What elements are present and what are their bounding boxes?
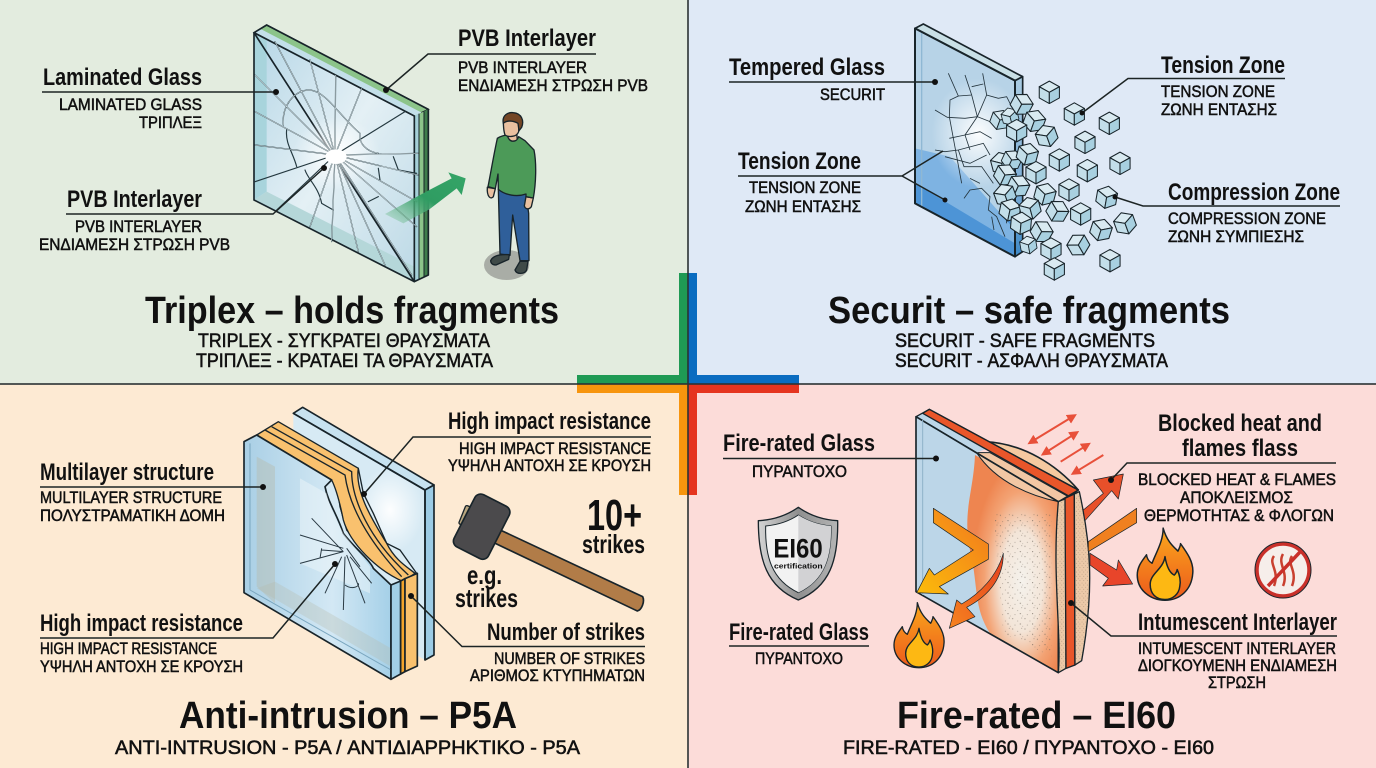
label: strikes count: strikes bbox=[582, 529, 645, 559]
illustration: multilayer glass bbox=[244, 407, 434, 679]
heading: securit: SECURIT - ΑΣΦΑΛΗ ΘΡΑΥΣΜΑΤΑ bbox=[895, 351, 1168, 372]
label: number of strikes: Number of strikes bbox=[487, 619, 645, 646]
heading: anti-intrusion: Anti-intrusion – P5A bbox=[179, 695, 517, 737]
heading: securit bbox=[828, 290, 1230, 372]
label: compression zone: ΖΩΝΗ ΣΥΜΠΙΕΣΗΣ bbox=[1168, 227, 1304, 246]
cracks bbox=[935, 73, 1012, 237]
label: fire-rated glass bottom: ΠΥΡΑΝΤΟΧΟ bbox=[755, 649, 843, 668]
label: strikes count: 10+ bbox=[587, 491, 642, 540]
heading: triplex: Triplex – holds fragments bbox=[145, 290, 559, 332]
label: tempered glass: SECURIT bbox=[820, 85, 885, 104]
icon: EI60 shield: certification bbox=[774, 561, 823, 570]
heading: fire-rated bbox=[843, 695, 1214, 759]
label: intumescent interlayer: ΔΙΟΓΚΟΥΜΕΝΗ ΕΝΔΙΑΜΕΣΗ bbox=[1138, 656, 1337, 675]
label: high impact right bbox=[361, 408, 651, 497]
illustration: fire-rated glass bbox=[916, 409, 1090, 673]
label: laminated glass bbox=[42, 64, 279, 132]
label: tension zone left bbox=[738, 148, 948, 216]
label: blocked heat and flames: ΑΠΟΚΛΕΙΣΜΟΣ bbox=[1180, 488, 1293, 507]
heading: triplex: ΤΡΙΠΛΕΞ - ΚΡΑΤΑΕΙ ΤΑ ΘΡΑΥΣΜΑΤΑ bbox=[196, 351, 493, 372]
label: intumescent interlayer: ΣΤΡΩΣΗ bbox=[1208, 673, 1266, 692]
icon: no heat bbox=[1255, 542, 1311, 598]
label: tension zone right: Tension Zone bbox=[1161, 52, 1285, 79]
label: multilayer structure: Multilayer structure bbox=[40, 459, 214, 486]
label: compression zone: COMPRESSION ZONE bbox=[1168, 209, 1326, 228]
label: pvb interlayer left: ΕΝΔΙΑΜΕΣΗ ΣΤΡΩΣΗ PVB bbox=[39, 235, 230, 254]
label: fire-rated glass top: Fire-rated Glass bbox=[723, 430, 875, 457]
heading: fire-rated: FIRE-RATED - EI60 / ΠΥΡΑΝΤΟΧΟ - EI60 bbox=[843, 738, 1214, 759]
label: blocked heat and flames: BLOCKED HEAT & FLAMES bbox=[1138, 470, 1336, 489]
label: pvb interlayer right bbox=[383, 25, 648, 95]
label: high impact left: HIGH IMPACT RESISTANCE bbox=[40, 639, 217, 658]
label: pvb interlayer right: PVB INTERLAYER bbox=[458, 58, 587, 77]
arrows: heat transfer bbox=[917, 416, 1137, 628]
label: tension zone left: ΖΩΝΗ ΕΝΤΑΣΗΣ bbox=[745, 197, 861, 216]
label: e.g. strikes: strikes bbox=[455, 583, 518, 613]
cracks bbox=[300, 518, 372, 610]
label: laminated glass: LAMINATED GLASS bbox=[59, 95, 202, 114]
label: fire-rated glass top bbox=[723, 430, 939, 481]
label: high impact right: High impact resistance bbox=[448, 408, 651, 435]
label: e.g. strikes bbox=[455, 560, 518, 613]
label: pvb interlayer left: PVB Interlayer bbox=[67, 186, 202, 213]
arrow: green through glass bbox=[385, 172, 466, 223]
icon: flame bottom bbox=[894, 603, 944, 668]
label: blocked heat and flames: Blocked heat and bbox=[1158, 410, 1322, 437]
label: intumescent interlayer bbox=[1068, 600, 1337, 692]
label: pvb interlayer right: ΕΝΔΙΑΜΕΣΗ ΣΤΡΩΣΗ PVB bbox=[458, 76, 648, 95]
label: fire-rated glass bottom: Fire-rated Glass bbox=[729, 619, 869, 646]
illustration: cracked laminated glass bbox=[254, 25, 428, 282]
heading: anti-intrusion bbox=[115, 695, 580, 759]
heading: securit: Securit – safe fragments bbox=[828, 290, 1230, 332]
label: tension zone left: Tension Zone bbox=[738, 148, 861, 175]
label: pvb interlayer left: PVB INTERLAYER bbox=[75, 217, 202, 236]
heading: securit: SECURIT - SAFE FRAGMENTS bbox=[895, 331, 1155, 352]
label: tension zone left: TENSION ZONE bbox=[749, 178, 861, 197]
cracks bbox=[255, 42, 418, 275]
label: tempered glass bbox=[729, 54, 938, 104]
label: tension zone right: TENSION ZONE bbox=[1161, 82, 1275, 101]
label: multilayer structure: MULTILAYER STRUCTURE bbox=[40, 488, 222, 507]
label: multilayer structure bbox=[40, 459, 266, 525]
label: fire-rated glass top: ΠΥΡΑΝΤΟΧΟ bbox=[752, 462, 847, 481]
label: laminated glass: ΤΡΙΠΛΕΞ bbox=[139, 113, 202, 132]
illustration: glass fragments bbox=[988, 81, 1138, 280]
label: blocked heat and flames: ΘΕΡΜΟΤΗΤΑΣ & ΦΛΟΓΩΝ bbox=[1144, 506, 1334, 525]
panel: triplex bbox=[0, 0, 688, 384]
label: high impact right: HIGH IMPACT RESISTANCE bbox=[459, 439, 651, 458]
label: compression zone bbox=[1112, 179, 1340, 246]
label: laminated glass: Laminated Glass bbox=[43, 64, 202, 91]
icon: flame right bbox=[1137, 528, 1193, 600]
label: pvb interlayer right: PVB Interlayer bbox=[458, 25, 596, 52]
label: e.g. strikes: e.g. bbox=[467, 560, 502, 590]
icon: EI60 shield bbox=[758, 507, 838, 600]
label: number of strikes bbox=[408, 593, 645, 685]
label: tension zone right bbox=[1080, 52, 1285, 119]
heading: triplex: TRIPLEX - ΣΥΓΚΡΑΤΕΙ ΘΡΑΥΣΜΑΤΑ bbox=[198, 331, 490, 352]
panel: fire-rated bbox=[688, 384, 1376, 768]
heading: anti-intrusion: ANTI-INTRUSION - P5A / ΑΝΤΙΔΙΑΡΡΗΚΤΙΚΟ - P5A bbox=[115, 738, 580, 759]
label: number of strikes: ΑΡΙΘΜΟΣ ΚΤΥΠΗΜΑΤΩΝ bbox=[470, 666, 645, 685]
label: blocked heat and flames bbox=[1108, 410, 1336, 525]
heading: triplex bbox=[145, 290, 559, 372]
icon: hammer bbox=[451, 492, 643, 611]
label: multilayer structure: ΠΟΛΥΣΤΡΑΜΑΤΙΚΗ ΔΟΜΗ bbox=[40, 506, 225, 525]
icon: EI60 shield: EI60 bbox=[773, 534, 823, 564]
panel: securit bbox=[688, 0, 1376, 384]
label: tempered glass: Tempered Glass bbox=[729, 54, 885, 81]
icon: person bbox=[484, 113, 536, 280]
label: blocked heat and flames: flames flass bbox=[1182, 435, 1298, 462]
label: tension zone right: ΖΩΝΗ ΕΝΤΑΣΗΣ bbox=[1161, 100, 1277, 119]
illustration: tempered glass pane bbox=[915, 24, 1025, 257]
label: number of strikes: NUMBER OF STRIKES bbox=[494, 649, 645, 668]
panel: anti-intrusion bbox=[0, 384, 688, 768]
label: high impact left: High impact resistance bbox=[40, 610, 243, 637]
label: high impact left bbox=[40, 561, 338, 676]
label: strikes count bbox=[582, 491, 645, 559]
label: high impact left: ΥΨΗΛΗ ΑΝΤΟΧΗ ΣΕ ΚΡΟΥΣΗ bbox=[40, 657, 243, 676]
label: pvb interlayer left bbox=[39, 165, 327, 254]
label: intumescent interlayer: INTUMESCENT INTERLAYER bbox=[1138, 639, 1336, 658]
label: high impact right: ΥΨΗΛΗ ΑΝΤΟΧΗ ΣΕ ΚΡΟΥΣΗ bbox=[448, 456, 651, 475]
heading: fire-rated: Fire-rated – EI60 bbox=[897, 695, 1176, 737]
label: fire-rated glass bottom bbox=[729, 619, 869, 668]
